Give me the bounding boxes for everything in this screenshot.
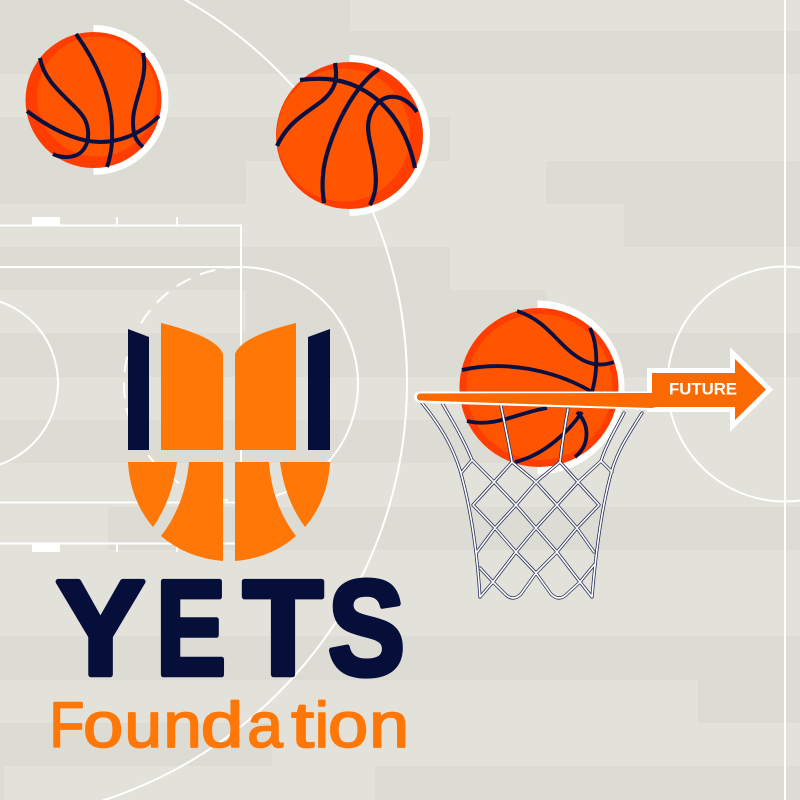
basketball in hoop [460, 300, 624, 474]
arrow label: FUTURE [669, 380, 737, 398]
basketball top left [26, 25, 168, 175]
wordmark YETS: S [328, 552, 405, 704]
future arrow [415, 359, 766, 420]
wordmark Foundation: i [315, 689, 329, 761]
wordmark YETS: E [156, 552, 226, 704]
wordmark YETS: T [243, 552, 323, 704]
wordmark Foundation: n [163, 689, 202, 761]
wordmark Foundation: t [291, 689, 314, 761]
logo emblem [128, 323, 330, 561]
wordmark Foundation: a [247, 689, 283, 761]
wordmark YETS: Y [56, 552, 145, 704]
wordmark Foundation: u [124, 689, 162, 761]
basketball hoop net [422, 403, 642, 598]
basketball top centre [276, 55, 430, 216]
wordmark Foundation: o [83, 689, 123, 761]
wordmark Foundation: d [201, 689, 244, 761]
wordmark Foundation: F [49, 689, 84, 761]
wordmark Foundation: n [369, 689, 409, 761]
wordmark Foundation: o [328, 689, 368, 761]
